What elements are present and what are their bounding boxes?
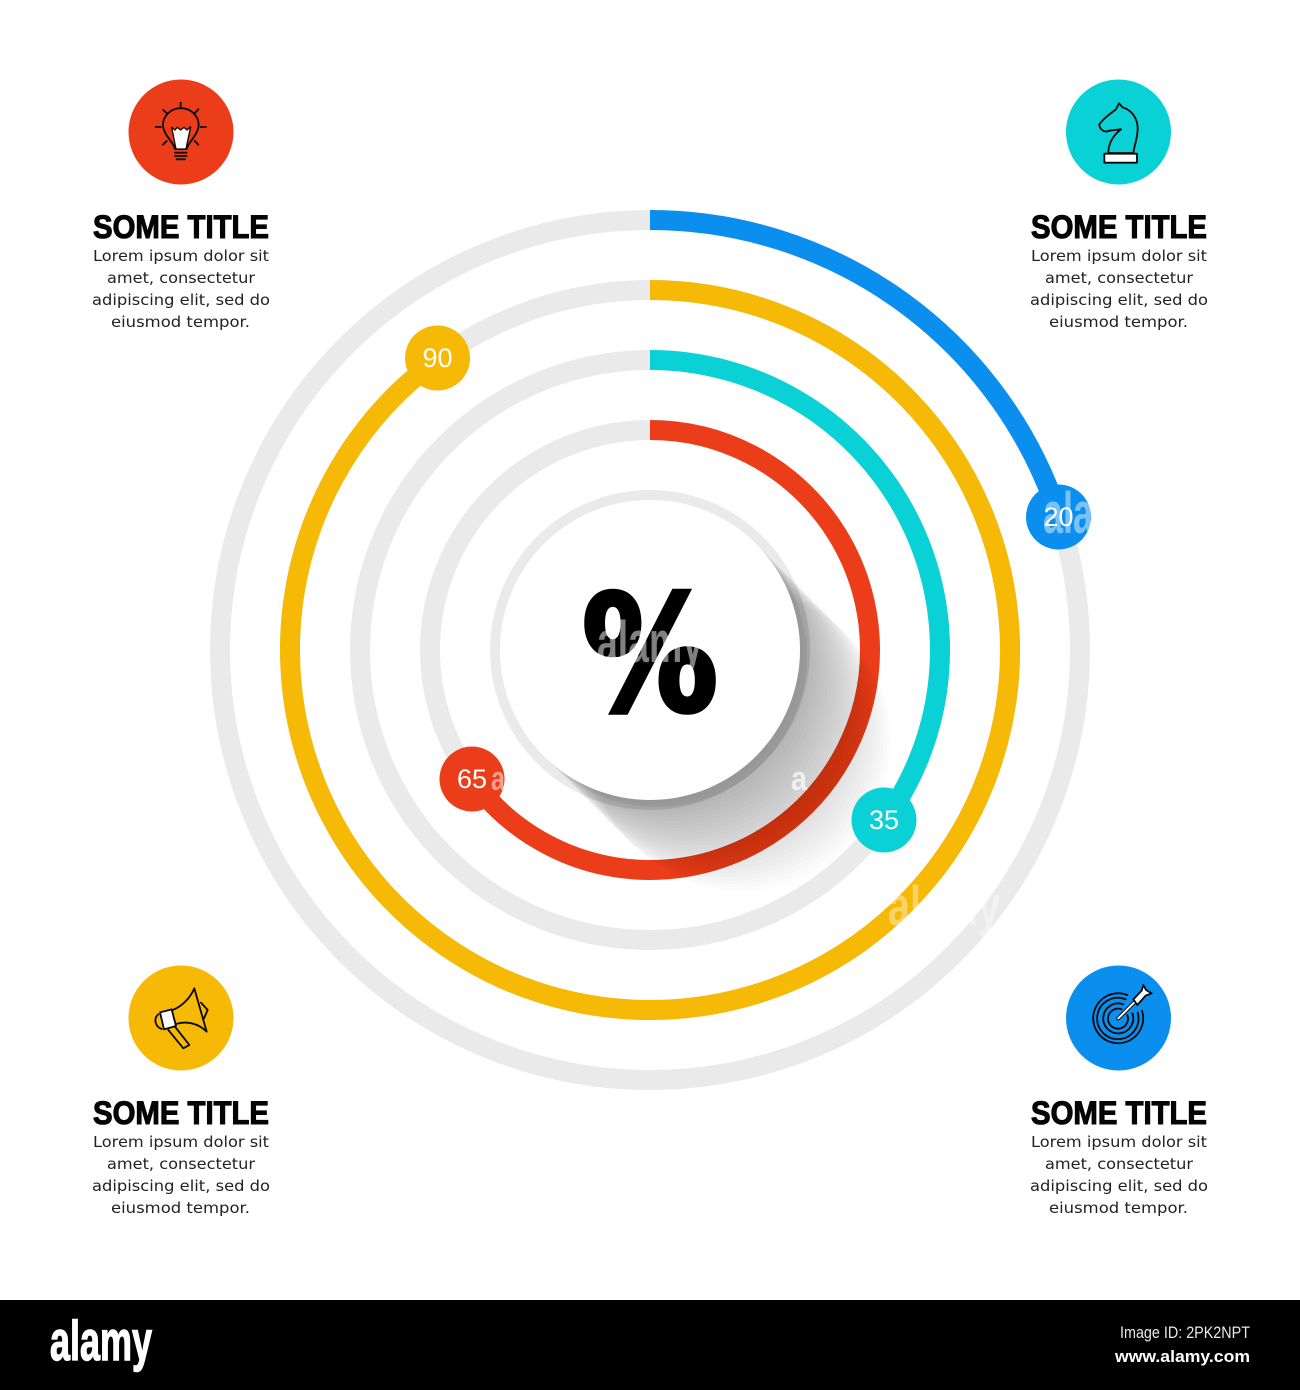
icon: megaphone bbox=[128, 966, 234, 1070]
description: amet, consectetur bbox=[1045, 269, 1194, 287]
description: amet, consectetur bbox=[107, 269, 256, 287]
arc: yellow 90 percent bbox=[290, 290, 1010, 1010]
description: eiusmod tempor. bbox=[1049, 313, 1188, 331]
title: SOME TITLE bbox=[93, 1095, 269, 1131]
stock watermark fragments: a bbox=[190, 1023, 207, 1056]
stock watermark fragments: alamy bbox=[888, 874, 1000, 937]
icon: light bulb bbox=[128, 80, 234, 184]
node: 65: 65 bbox=[457, 764, 487, 794]
description: adipiscing elit, sed do bbox=[1030, 291, 1208, 309]
title: SOME TITLE bbox=[1031, 209, 1207, 245]
node: 20: 20 bbox=[1043, 502, 1074, 532]
track rings bbox=[220, 220, 1080, 1080]
description: amet, consectetur bbox=[1045, 1155, 1194, 1173]
block: top right bbox=[1030, 80, 1208, 331]
description bbox=[1030, 247, 1208, 331]
title: SOME TITLE bbox=[93, 209, 269, 245]
block: top left bbox=[92, 80, 270, 331]
description: Lorem ipsum dolor sit bbox=[1031, 247, 1207, 265]
block: bottom right bbox=[1030, 966, 1208, 1217]
node: 90 bbox=[405, 326, 470, 390]
long shadow of centre disc bbox=[504, 504, 891, 891]
stock watermark fragments: ala bbox=[1043, 481, 1093, 546]
arc: teal 35 percent bbox=[650, 360, 940, 820]
description bbox=[92, 247, 270, 331]
arc: blue 20 percent bbox=[650, 220, 1059, 517]
description bbox=[1030, 1133, 1208, 1217]
description: amet, consectetur bbox=[107, 1155, 256, 1173]
arc: red 65 percent bbox=[472, 430, 870, 870]
stock watermark fragments: a bbox=[1090, 1023, 1107, 1056]
description: eiusmod tempor. bbox=[111, 1199, 250, 1217]
node: 90: 90 bbox=[422, 343, 453, 373]
description: adipiscing elit, sed do bbox=[92, 291, 270, 309]
description: eiusmod tempor. bbox=[1049, 1199, 1188, 1217]
node: 35: 35 bbox=[869, 805, 899, 835]
footer logo: alamy bbox=[50, 1309, 152, 1372]
title: SOME TITLE bbox=[1031, 1095, 1207, 1131]
stock watermark fragments: a bbox=[491, 760, 506, 798]
stock watermark fragments: alamy bbox=[597, 610, 703, 675]
node: 65 bbox=[440, 746, 504, 812]
image id: Image ID: 2PK2NPT bbox=[1120, 1323, 1250, 1342]
description: Lorem ipsum dolor sit bbox=[93, 247, 269, 265]
icon: target with arrow bbox=[1066, 966, 1171, 1070]
block: bottom left bbox=[92, 966, 270, 1217]
description bbox=[92, 1133, 270, 1217]
description: eiusmod tempor. bbox=[111, 313, 250, 331]
footer bar bbox=[0, 1300, 1300, 1390]
node: 20 bbox=[1026, 484, 1091, 550]
stock watermark fragments: a bbox=[791, 760, 808, 798]
radial progress chart bbox=[220, 220, 1091, 1080]
description: adipiscing elit, sed do bbox=[1030, 1177, 1208, 1195]
description: Lorem ipsum dolor sit bbox=[1031, 1133, 1207, 1151]
description: Lorem ipsum dolor sit bbox=[93, 1133, 269, 1151]
footer url: www.alamy.com bbox=[1114, 1347, 1250, 1366]
percent symbol: % bbox=[582, 561, 718, 748]
centre disc bbox=[500, 500, 800, 800]
description: adipiscing elit, sed do bbox=[92, 1177, 270, 1195]
stock watermark fragments bbox=[190, 481, 1107, 1056]
node: 35 bbox=[852, 788, 916, 852]
icon: chess knight bbox=[1066, 80, 1171, 184]
